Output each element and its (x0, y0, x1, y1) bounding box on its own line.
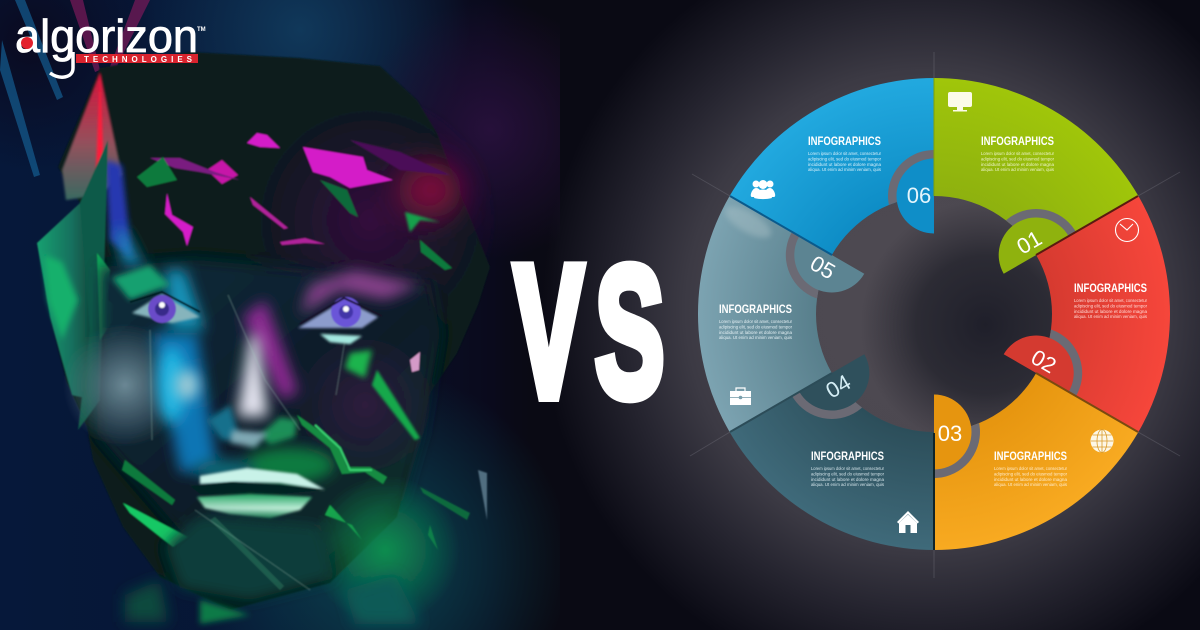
text block: green: Lorem ipsum dolor sit amet, consectetur (981, 151, 1054, 156)
number 06: 06 (907, 183, 931, 208)
logo wordmark: algorizon (15, 10, 198, 62)
text block: light teal: INFOGRAPHICS (719, 304, 792, 316)
text block: red: adipiscing elit, sed do eiusmod tempor (1074, 303, 1147, 308)
text block: orange: aliqua. Ut enim ad minim veniam, quis (994, 482, 1068, 487)
text block: blue: Lorem ipsum dolor sit amet, consectetur (808, 151, 881, 156)
icon: clock (1116, 218, 1138, 242)
VS heading: S (595, 228, 664, 435)
text block: orange: incididunt ut labore et dolore magna (994, 477, 1067, 482)
chart: six-part infographic wheel (698, 78, 1170, 550)
number 03: 03 (938, 421, 962, 446)
panel: right glow background (500, 0, 1200, 630)
text block: orange: INFOGRAPHICS (994, 451, 1067, 463)
text block: orange: Lorem ipsum dolor sit amet, consectetur (994, 466, 1067, 471)
number 02: 02 (1027, 344, 1061, 378)
text block: dark teal: aliqua. Ut enim ad minim veniam, quis (811, 482, 885, 487)
logo trademark: TM (197, 27, 206, 33)
text block: red: Lorem ipsum dolor sit amet, consectetur (1074, 298, 1147, 303)
icon: globe (1090, 430, 1114, 452)
magenta shards (150, 133, 450, 372)
jaw and neck (125, 515, 420, 624)
segment highlight: light teal corner (725, 206, 772, 239)
brow green left (112, 265, 170, 300)
text block: blue: adipiscing elit, sed do eiusmod tempor (808, 156, 881, 161)
logo: algorizon technologies (15, 10, 206, 77)
text block: light teal: aliqua. Ut enim ad minim veniam, quis (719, 335, 793, 340)
right eye (298, 297, 382, 344)
text block: light teal: incididunt ut labore et dolore magna (719, 330, 792, 335)
text block: green: incididunt ut labore et dolore magna (981, 162, 1054, 167)
segment 01: green (934, 78, 1138, 274)
VS heading: V (515, 230, 582, 435)
text block: dark teal: Lorem ipsum dolor sit amet, consectetur (811, 466, 884, 471)
text block: blue (808, 136, 882, 172)
number 04: 04 (821, 369, 855, 403)
blue beam (153, 270, 217, 473)
text block: red: aliqua. Ut enim ad minim veniam, quis (1074, 314, 1148, 319)
wheel centre shading (860, 200, 1110, 450)
panel: left navy background (0, 0, 560, 630)
segment 04: dark teal (730, 354, 934, 550)
green shards (122, 157, 487, 550)
face skin (97, 260, 440, 567)
text block: dark teal: incididunt ut labore et dolore magna (811, 477, 884, 482)
text block: dark teal (811, 451, 885, 487)
segment 06: blue (730, 78, 934, 254)
wheel extension lines (690, 52, 1180, 578)
icon: house (897, 511, 919, 533)
VS heading (515, 228, 664, 435)
text block: green (981, 136, 1055, 172)
icon: people (751, 180, 775, 199)
text block: blue: INFOGRAPHICS (808, 136, 881, 148)
face illustration (37, 52, 500, 625)
segment 03: orange (934, 374, 1138, 550)
forehead and hair colour fields (37, 72, 500, 430)
text block: blue: aliqua. Ut enim ad minim veniam, quis (808, 167, 882, 172)
number 05: 05 (806, 250, 840, 284)
text block: light teal (719, 304, 793, 340)
icon: briefcase (730, 388, 751, 405)
text block: green: aliqua. Ut enim ad minim veniam, quis (981, 167, 1055, 172)
glass streaks (150, 295, 345, 590)
number 01: 01 (1012, 225, 1046, 259)
text block: green: adipiscing elit, sed do eiusmod tempor (981, 156, 1054, 161)
logo g tail (50, 52, 73, 77)
text block: orange (994, 451, 1068, 487)
segment 05: light teal (698, 196, 864, 432)
upper chin green (195, 447, 335, 483)
text block: red (1074, 283, 1148, 319)
right cheek purple (290, 330, 440, 480)
text block: dark teal: adipiscing elit, sed do eiusmod tempor (811, 471, 884, 476)
segment 02: red (1004, 196, 1170, 432)
text block: light teal: adipiscing elit, sed do eiusmod tempor (719, 324, 792, 329)
text block: blue: incididunt ut labore et dolore magna (808, 162, 881, 167)
text block: red: INFOGRAPHICS (1074, 283, 1147, 295)
text block: orange: adipiscing elit, sed do eiusmod tempor (994, 471, 1067, 476)
text block: dark teal: INFOGRAPHICS (811, 451, 884, 463)
logo red drop (21, 37, 33, 49)
text block: light teal: Lorem ipsum dolor sit amet, consectetur (719, 319, 792, 324)
nose (207, 300, 298, 448)
lower right green glow (310, 475, 460, 625)
text block: green: INFOGRAPHICS (981, 136, 1054, 148)
logo red bar: TECHNOLOGIES (84, 55, 193, 64)
left eye (130, 292, 200, 323)
lips (190, 468, 326, 518)
segment seam shadows (730, 78, 1138, 550)
text block: red: incididunt ut labore et dolore magna (1074, 309, 1147, 314)
icon: monitor (948, 92, 972, 112)
right brow purple (300, 270, 420, 315)
head silhouette (37, 52, 490, 610)
left cheek (63, 323, 187, 447)
